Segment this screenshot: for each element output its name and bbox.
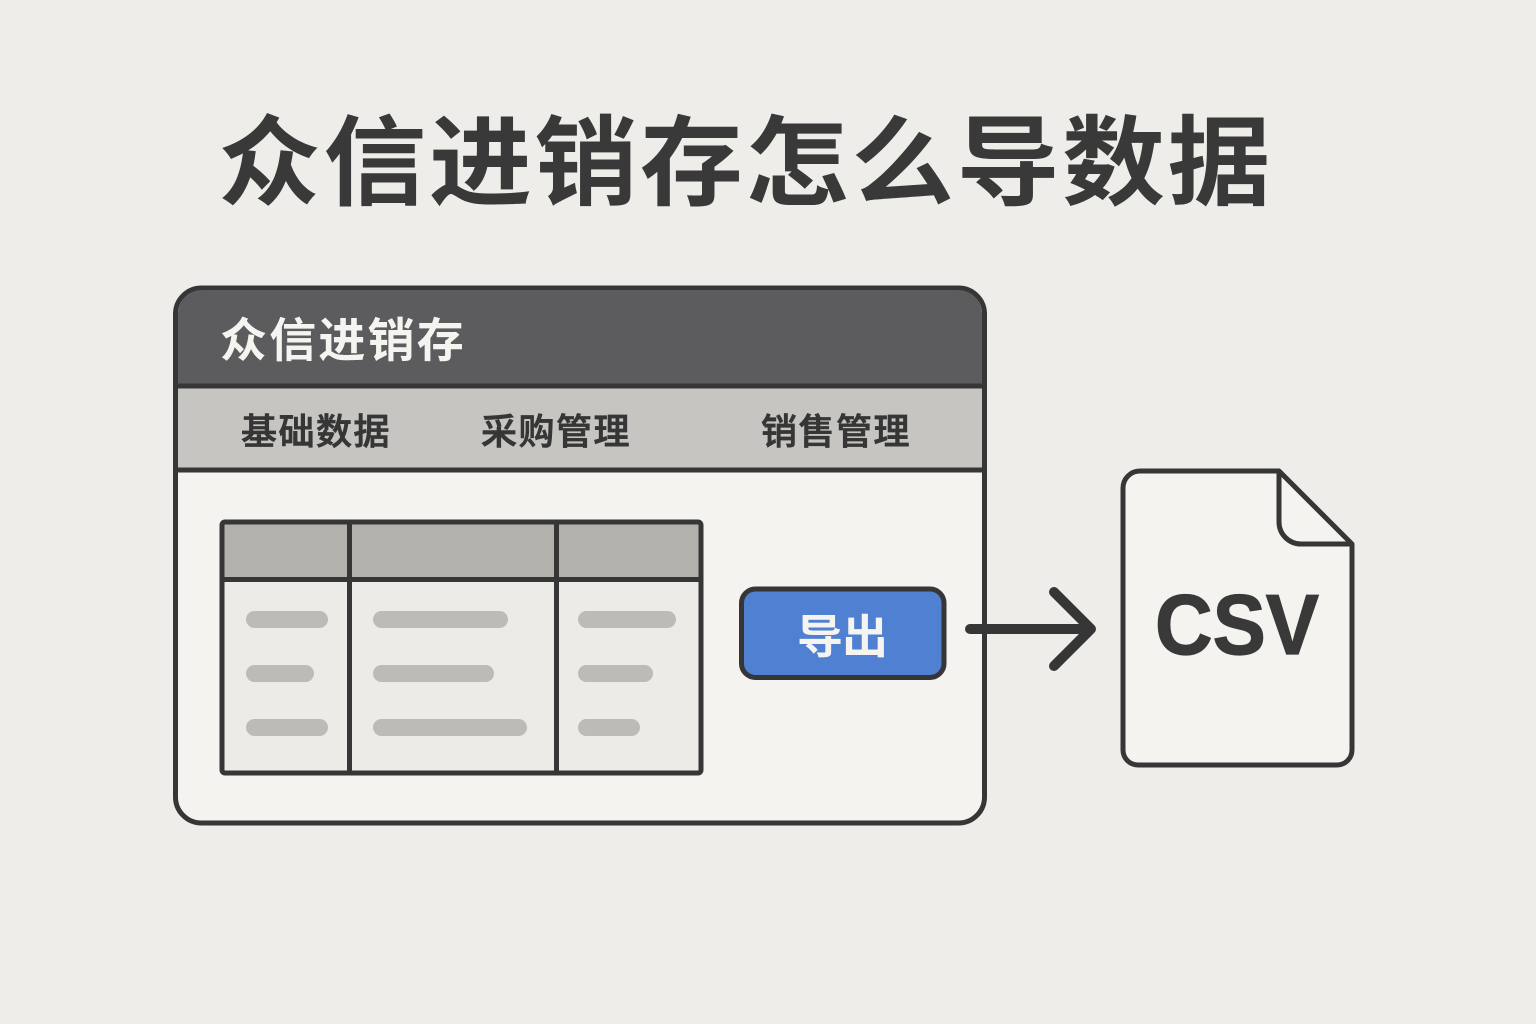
title: 众信进销存怎么导数据: [218, 109, 1273, 218]
export button: [742, 589, 944, 678]
menu bar: 基础数据: [241, 411, 391, 452]
window title bar: 众信进销存: [220, 314, 466, 367]
export button: 导出: [797, 611, 887, 663]
menu bar: [178, 386, 982, 471]
menu bar: 采购管理: [481, 411, 631, 452]
icon: CSV file: [1123, 471, 1352, 765]
table row placeholders: [246, 611, 676, 736]
window title bar: [178, 290, 982, 386]
icon: CSV file: CSV: [1155, 578, 1319, 673]
data table: [222, 522, 701, 773]
menu bar: 销售管理: [761, 411, 911, 452]
arrow: export to CSV: [970, 592, 1091, 666]
panel: application window: [176, 288, 984, 823]
